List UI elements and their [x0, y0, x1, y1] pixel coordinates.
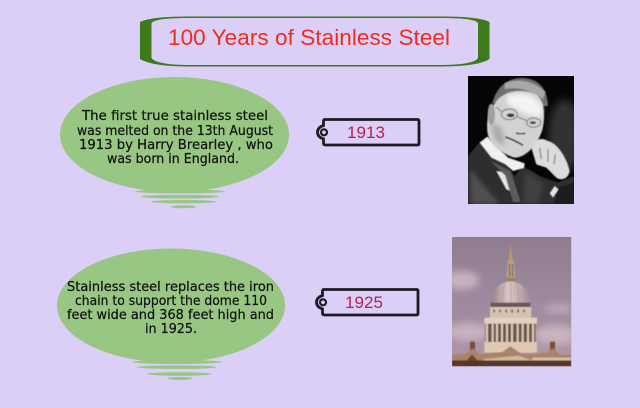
face: [487, 91, 544, 158]
year tag: 1925: [316, 290, 418, 315]
clouds: [445, 271, 577, 345]
drum and colonnade: [484, 307, 537, 353]
hand: [531, 139, 570, 179]
hair: [492, 78, 548, 106]
bubble 1925 text: in 1925.: [145, 322, 197, 337]
lantern and spire: [505, 244, 517, 282]
year tag: 1913: [318, 120, 419, 145]
bubble 1913 text: 1913 by Harry Brearley , who: [79, 138, 273, 153]
roofline buildings: [452, 342, 571, 366]
bubble 1925 ripples: [132, 360, 222, 380]
bubble 1913 ripples: [135, 190, 225, 208]
bubble 1925 text: chain to support the dome 110: [75, 294, 267, 309]
ear: [488, 104, 495, 125]
bubble 1913 text: was melted on the 13th August: [77, 124, 273, 139]
year 1913: 1913: [347, 123, 385, 142]
bubble 1913 text: The first true stainless steel: [81, 109, 268, 124]
bubble 1925 text: Stainless steel replaces the iron: [67, 280, 274, 295]
bubble 1925 text: feet wide and 368 feet high and: [67, 308, 274, 323]
bubble 1913 text: was born in England.: [107, 152, 239, 167]
bubble 1913 text: [77, 109, 273, 167]
glasses, eyes, nose, mouth: [496, 107, 541, 127]
bubble 1925 text: [67, 280, 274, 337]
photo: St Paul's dome: [445, 237, 577, 366]
bubble: 1913: [60, 77, 289, 208]
title: 100 Years of Stainless Steel: [168, 25, 450, 50]
year 1925: 1925: [345, 293, 383, 312]
bubble: 1925: [57, 248, 285, 380]
collar and shirt: [480, 137, 525, 171]
jacket: [468, 141, 574, 204]
title frame: [140, 16, 490, 66]
dome: [491, 281, 530, 307]
photo: Harry Brearley portrait: [468, 76, 581, 204]
